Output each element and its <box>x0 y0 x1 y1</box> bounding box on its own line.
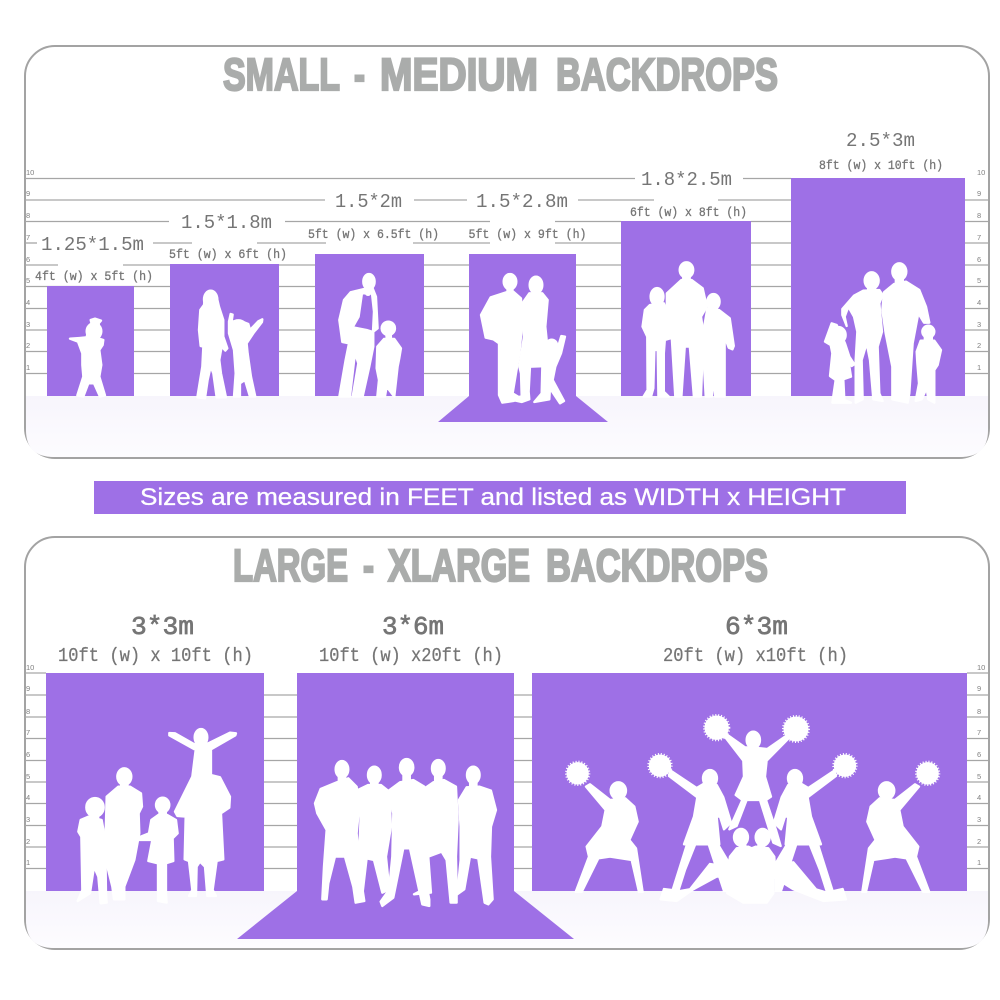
scale numbers left: 1 <box>26 858 30 867</box>
scale numbers left: 8 <box>26 211 30 220</box>
scale numbers left: 6 <box>26 255 30 264</box>
panel: small to medium backdrops <box>25 46 989 458</box>
scale numbers right: 4 <box>977 793 981 802</box>
label: 6*3m: 6*3m <box>725 612 788 642</box>
label: 8ft x 10ft: 8ft (w) x 10ft (h) <box>819 158 943 173</box>
scale numbers left: 1 <box>26 363 30 372</box>
scale numbers left: 10 <box>26 168 34 177</box>
scale numbers left <box>26 663 34 867</box>
banner: measurement note <box>94 481 906 514</box>
scale numbers right: 9 <box>977 684 981 693</box>
label: 3*6m: 3*6m <box>382 612 444 642</box>
backdrop: 3*6m with floor sweep <box>237 612 574 939</box>
scale numbers left: 9 <box>26 684 30 693</box>
scale numbers right: 10 <box>977 168 985 177</box>
silhouette: five men <box>315 759 496 906</box>
heading: large to xlarge: BACKDROPS <box>546 540 768 591</box>
label: 1.5*2.8m: 1.5*2.8m <box>476 191 568 213</box>
label: 1.25*1.5m: 1.25*1.5m <box>41 234 144 256</box>
label: 10ft x 10ft: 10ft (w) x 10ft (h) <box>58 645 253 667</box>
scale numbers left <box>26 168 34 372</box>
backdrop: 3*3m <box>46 612 264 903</box>
scale numbers right: 6 <box>977 255 981 264</box>
scale numbers right: 4 <box>977 298 981 307</box>
scale numbers left: 3 <box>26 815 30 824</box>
scale numbers left: 4 <box>26 793 30 802</box>
scale numbers right: 7 <box>977 233 981 242</box>
backdrop: 1.25*1.5m <box>35 234 153 397</box>
scale numbers right <box>977 168 985 372</box>
silhouette: family of three <box>481 274 565 403</box>
panel: large to xlarge backdrops <box>25 537 989 949</box>
scale numbers left: 7 <box>26 233 30 242</box>
heading: small to medium: SMALL <box>223 49 340 100</box>
backdrop: 6*3m <box>532 612 967 903</box>
heading: small to medium <box>223 49 778 100</box>
label: 5ft x 9ft: 5ft (w) x 9ft (h) <box>468 227 586 242</box>
heading: small to medium: - <box>354 49 365 100</box>
scale numbers right: 1 <box>977 858 981 867</box>
backdrop: 1.5*2m <box>308 191 439 397</box>
label: 4ft x 5ft: 4ft (w) x 5ft (h) <box>35 269 153 284</box>
silhouette: man and two children <box>643 262 734 397</box>
scale numbers right: 8 <box>977 211 981 220</box>
backdrop: 1.5*1.8m <box>169 212 287 398</box>
scale numbers left: 8 <box>26 707 30 716</box>
scale numbers right: 6 <box>977 750 981 759</box>
scale numbers right: 5 <box>977 772 981 781</box>
scale numbers right: 9 <box>977 189 981 198</box>
scale numbers left: 7 <box>26 728 30 737</box>
label: 6ft x 8ft: 6ft (w) x 8ft (h) <box>630 205 747 220</box>
backdrop: 2.5*3m <box>791 130 965 403</box>
label: 1.5*1.8m: 1.5*1.8m <box>181 212 272 234</box>
scale numbers left: 3 <box>26 320 30 329</box>
silhouette: man and boy <box>339 274 401 397</box>
scale numbers right: 7 <box>977 728 981 737</box>
scale numbers right: 3 <box>977 320 981 329</box>
backdrop: 1.8*2.5m <box>621 169 751 397</box>
silhouette: family of four <box>825 263 941 403</box>
scale numbers right: 3 <box>977 815 981 824</box>
scale numbers left: 6 <box>26 750 30 759</box>
silhouette: cheerleader squad <box>567 716 938 903</box>
heading: large to xlarge: XLARGE <box>388 540 530 591</box>
scale numbers right: 1 <box>977 363 981 372</box>
scale numbers right: 2 <box>977 341 981 350</box>
scale numbers left: 10 <box>26 663 34 672</box>
label: 5ft x 6ft: 5ft (w) x 6ft (h) <box>169 247 287 262</box>
scale numbers left: 5 <box>26 772 30 781</box>
scale numbers left: 2 <box>26 837 30 846</box>
silhouette: family with girl on shoulders <box>78 729 236 903</box>
scale numbers right: 10 <box>977 663 985 672</box>
scale numbers right <box>977 663 985 867</box>
banner: measurement note: Sizes are measured in FEET and listed as WIDTH x HEIGHT <box>140 484 846 511</box>
scale numbers left: 5 <box>26 276 30 285</box>
scale numbers right: 2 <box>977 837 981 846</box>
silhouette: woman and child <box>197 291 262 398</box>
label: 1.8*2.5m: 1.8*2.5m <box>641 169 732 191</box>
silhouette: toddler <box>70 319 105 397</box>
label: 10ft x 20ft: 10ft (w) x20ft (h) <box>319 645 503 667</box>
scale numbers left: 9 <box>26 189 30 198</box>
heading: small to medium: BACKDROPS <box>556 49 778 100</box>
label: 1.5*2m: 1.5*2m <box>335 191 402 213</box>
scale numbers left: 4 <box>26 298 30 307</box>
scale numbers right: 8 <box>977 707 981 716</box>
heading: small to medium: MEDIUM <box>380 49 538 100</box>
scale numbers right: 5 <box>977 276 981 285</box>
heading: large to xlarge: - <box>363 540 374 591</box>
label: 5ft x 6.5ft: 5ft (w) x 6.5ft (h) <box>308 227 439 242</box>
label: 3*3m: 3*3m <box>131 612 194 642</box>
label: 2.5*3m: 2.5*3m <box>846 130 915 152</box>
scale numbers left: 2 <box>26 341 30 350</box>
label: 20ft x 10ft: 20ft (w) x10ft (h) <box>663 645 848 667</box>
heading: large to xlarge: LARGE <box>233 540 348 591</box>
backdrop: 1.5*2.8m with floor sweep <box>438 191 608 422</box>
heading: large to xlarge <box>233 540 768 591</box>
